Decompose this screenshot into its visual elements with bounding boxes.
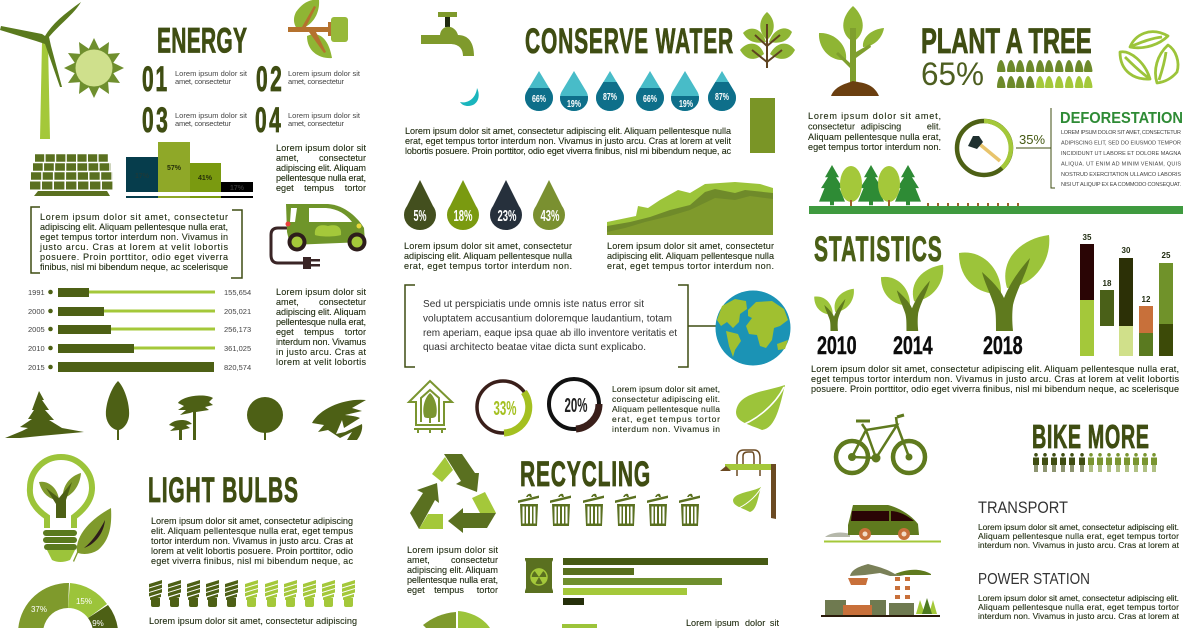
text block: Lorem — [686, 618, 712, 628]
text block: posuere. Proin porttitor, odio eget viverra finibus, nisl mi bibendum neque, ac scelerisque — [811, 384, 1179, 394]
text block: eget — [407, 585, 425, 595]
panel: statistics — [811, 231, 1179, 394]
year labels: 2018 — [983, 331, 1023, 360]
text block — [808, 111, 941, 152]
text block: ADIPISCING ELIT, SED DO EIUSMOD TEMPOR — [1061, 140, 1181, 146]
text block: INCIDIDUNT UT LABORE ET DOLORE MAGNA — [1061, 151, 1181, 157]
icon: branch with pot — [288, 0, 348, 58]
pictogram: bins — [518, 494, 700, 526]
numbered list: 04 — [255, 102, 281, 140]
text block — [686, 618, 779, 628]
chart: 20% ring — [549, 379, 599, 429]
text block: adipiscing elit. Aliquam pellentesque nulla — [607, 251, 775, 261]
text block: adipiscing elit. Aliquam — [407, 565, 498, 575]
text block: eget tempus tortor interdum non. Vivamus in justo arcu. Cras at lorem at velit lobortis — [811, 374, 1179, 384]
icons: tree silhouettes — [5, 381, 366, 440]
chart: 33% ring: 33% — [494, 398, 517, 420]
panel: plant a tree — [808, 6, 1183, 214]
text block: consectetur — [319, 297, 366, 307]
pictogram: percentage drops: 19% — [567, 99, 581, 110]
text block: Aliquam pellentesque nulla erat, eget tempus tortor — [978, 602, 1179, 612]
pictogram: large drops — [404, 180, 565, 230]
panel: conserve water — [404, 12, 795, 434]
donut chart: 9% — [92, 619, 104, 628]
bar chart: yearly values: 2010 — [28, 344, 45, 353]
text block: adipiscing elit. Aliquam — [276, 307, 366, 317]
pictogram: percentage drops: 66% — [643, 94, 657, 105]
stacked bar chart: 12 — [1142, 295, 1151, 304]
bar chart: yearly values: 2015 — [28, 363, 45, 372]
bar chart: yearly values: 256,173 — [224, 325, 251, 334]
bar chart: yearly values: 2000 — [28, 307, 45, 316]
heading: statistics: STATISTICS — [814, 231, 942, 269]
text block: Lorem ipsum dolor sit amet, consectetur — [404, 241, 572, 251]
text block: NISI UT ALIQUIP EX EA COMMODO CONSEQUAT. — [1061, 182, 1181, 188]
text block: tortor — [345, 183, 366, 193]
text block — [405, 126, 732, 156]
icon: water drop crescent — [460, 88, 479, 106]
numbered list: 03 — [142, 102, 168, 140]
pictogram: percentage drops: 19% — [679, 99, 693, 110]
heading: conserve water: CONSERVE WATER — [525, 23, 733, 61]
icon: faucet — [421, 12, 474, 56]
icon: leaf recycle — [1120, 32, 1178, 83]
panel: energy — [0, 0, 366, 372]
heading: energy: ENERGY — [157, 22, 247, 61]
pictogram: large drops: 43% — [540, 208, 560, 225]
text block — [151, 516, 353, 566]
text block: Lorem ipsum dolor sit — [276, 143, 366, 153]
text block: tortor — [345, 327, 366, 337]
illustration: forest and stumps — [809, 165, 1183, 214]
text block: adipiscing elit. Aliquam pellentesque nulla — [404, 251, 573, 261]
pictogram: percentage drops — [525, 71, 736, 111]
heading: light bulbs: LIGHT BULBS — [148, 472, 298, 510]
chart: axe ring — [957, 121, 1011, 175]
panel: recycling — [407, 450, 779, 628]
text block: lorem at velit lobortis posuere. Proin porttitor, odio — [151, 546, 353, 556]
text block: eget — [276, 183, 294, 193]
icon: tree house — [409, 381, 452, 433]
pictogram: percentage drops: 87% — [603, 92, 617, 103]
bracket callout: finibus, nisl mi bibendum neque, ac scelerisque — [40, 262, 228, 272]
pictogram: CFL bulbs — [149, 580, 355, 607]
heading: bike more: BIKE MORE — [1032, 418, 1149, 455]
year labels: 2010 — [817, 331, 857, 360]
text block: Aliquam pellentesque nulla — [612, 404, 720, 414]
text block: elit. Aliquam pellentesque nulla erat, eget tempus — [151, 526, 353, 536]
heading: plant a tree: PLANT A TREE — [921, 23, 1092, 61]
bar chart: yearly values: 1991 — [28, 288, 45, 297]
text block: Lorem ipsum dolor sit — [407, 545, 498, 555]
text block: Lorem ipsum dolor sit amet, — [808, 111, 941, 121]
text block: consectetur adipiscing elit. — [612, 394, 720, 404]
icon: sprout 2018 — [959, 235, 1049, 331]
text block: erat, eget tempus tortor — [612, 414, 720, 424]
bracket callout: quasi architecto beatae vitae dicta sunt explicabo. — [423, 342, 646, 353]
bar chart: yearly values: 2005 — [28, 325, 45, 334]
panel: light bulbs — [18, 457, 357, 628]
bar chart: yearly values: 205,021 — [224, 307, 251, 316]
bar chart: percentages: 57% — [167, 165, 182, 172]
text block: consectetur — [319, 153, 366, 163]
text block: lorem at velit lobortis — [276, 357, 366, 367]
text block: Aliquam pellentesque nulla erat, eget tempus tortor — [978, 531, 1179, 541]
numbered list: amet, consectetur — [175, 119, 232, 128]
numbered list: Lorem ipsum dolor sit — [288, 111, 361, 120]
text block — [607, 241, 775, 271]
stacked bar chart — [1080, 233, 1173, 356]
bracket callout: voluptatem accusantium doloremque laudantium, totam — [423, 314, 672, 324]
numbered list: Lorem ipsum dolor sit — [288, 69, 361, 78]
bar chart: yearly values — [28, 288, 251, 372]
icon: leaf — [736, 385, 785, 430]
bar chart: recycling — [563, 558, 768, 605]
bracket callout: Lorem ipsum dolor sit amet, consectetur — [40, 212, 228, 222]
text block: ipsum — [715, 618, 739, 628]
text block: elit. — [927, 122, 941, 132]
text block: interdum non. Vivamus — [276, 337, 366, 347]
icon: sprout 2014 — [881, 265, 943, 331]
bracket callout: posuere. Proin porttitor, odio eget viverra — [40, 252, 229, 262]
icon: eco light bulb — [30, 457, 111, 562]
heading: transport: TRANSPORT — [978, 498, 1068, 517]
text block: tortor — [477, 585, 498, 595]
green bar — [562, 624, 597, 628]
text block: pellentesque nulla erat, — [276, 173, 366, 183]
numbered list: 02 — [256, 61, 282, 99]
area chart — [607, 182, 773, 235]
bar chart: yearly values: 820,574 — [224, 363, 251, 372]
pictogram: large drops: 5% — [414, 208, 426, 225]
text block: tempus — [434, 585, 464, 595]
bar chart: percentages: 17% — [230, 185, 245, 192]
text block: sit — [770, 618, 779, 628]
text block: pellentesque nulla erat, — [276, 317, 366, 327]
numbered list: Lorem ipsum dolor sit — [175, 111, 248, 120]
text block: amet, — [407, 555, 430, 565]
text block: erat, eget tempus tortor interdum non. Vivamus in justo arcu. Cras at lorem at velit — [405, 136, 731, 146]
text block: consectetur — [451, 555, 498, 565]
chart: 33% ring — [477, 381, 529, 433]
text block: eget viverra finibus, nisl mi bibendum neque, ac — [151, 556, 353, 566]
bar chart: percentages: 17% — [135, 173, 150, 180]
chart: 20% ring: 20% — [564, 395, 588, 417]
pictogram: percentage drops: 87% — [715, 92, 729, 103]
icon: radioactive barrel — [525, 558, 553, 593]
bracket callout: eget tempus tortor interdum non. Vivamus in — [40, 232, 228, 242]
donut chart: 37% — [31, 605, 47, 614]
icon: power station — [821, 564, 940, 617]
text block: amet, — [276, 153, 299, 163]
numbered list: amet, consectetur — [288, 77, 344, 86]
text block: tempus — [304, 327, 334, 337]
text block: erat, eget tempus tortor interdum non. — [607, 261, 774, 271]
icon: sun — [64, 38, 124, 98]
text block — [978, 593, 1180, 621]
text block: eget — [276, 327, 294, 337]
bracket callout: adipiscing elit. Aliquam pellentesque nulla erat, — [40, 222, 228, 232]
icon: electric car — [271, 204, 366, 269]
text block — [612, 384, 720, 434]
text block: NOSTRUD EXERCITATION ULLAMCO LABORIS — [1061, 172, 1181, 178]
text block: Lorem ipsum dolor sit amet, consectetur adipiscing elit. Aliquam pellentesque nulla — [405, 126, 732, 136]
text block — [978, 522, 1180, 550]
text block: Lorem ipsum dolor sit amet, consectetur adipiscing — [149, 616, 357, 626]
year labels — [817, 331, 1023, 360]
text block: Lorem ipsum dolor sit amet, consectetur adipiscing — [151, 516, 353, 526]
text block: erat, eget tempus tortor interdum non. — [404, 261, 572, 271]
icon: sprout 2010 — [814, 289, 854, 331]
icon: shopping bag — [720, 450, 776, 519]
text block: adipiscing — [861, 122, 901, 132]
donut chart — [18, 583, 118, 628]
icon: globe — [716, 290, 790, 366]
icon: van — [824, 505, 941, 542]
numbered list: amet, consectetur — [288, 119, 344, 128]
heading: power station: POWER STATION — [978, 571, 1090, 588]
text block: interdum non. Vivamus in — [612, 424, 720, 434]
text block: dolor — [745, 618, 765, 628]
text block: Lorem ipsum dolor sit — [276, 287, 366, 297]
numbered list: 01 — [142, 61, 167, 99]
text block: lobortis posuere. Proin porttitor, odio eget viverra finibus, nisl mi bibendum neque, ac — [405, 146, 731, 156]
stacked bar chart: 30 — [1122, 246, 1131, 255]
text block: Lorem ipsum dolor sit amet, — [612, 384, 720, 394]
numbered list: Lorem ipsum dolor sit — [175, 69, 248, 78]
text block: LOREM IPSUM DOLOR SIT AMET, CONSECTETUR — [1061, 130, 1181, 136]
text block: interdum non. Vivamus in justo arcu. Cras at lorem at — [978, 540, 1180, 550]
donut chart: 15% — [76, 597, 92, 606]
text block: ALIQUA. UT ENIM AD MINIM VENIAM, QUIS — [1061, 162, 1181, 168]
text block — [1061, 130, 1181, 188]
text block: adipiscing elit. Aliquam — [276, 163, 366, 173]
pictogram: percentage drops: 66% — [532, 94, 546, 105]
text block — [811, 364, 1179, 394]
text block — [276, 143, 366, 193]
panel: bike more — [821, 415, 1180, 621]
icon: wind turbine — [0, 2, 81, 139]
text block — [407, 545, 498, 595]
text block: Aliquam pellentesque nulla erat, — [808, 132, 941, 142]
text block: tempus — [304, 183, 334, 193]
icon: recycle arrows — [410, 454, 496, 533]
icon: seedling — [819, 6, 884, 96]
pictogram: large drops: 18% — [454, 208, 472, 225]
icon: solar panel — [30, 158, 114, 196]
bar chart: percentages: 41% — [198, 175, 213, 182]
pictogram: trees — [997, 60, 1092, 88]
statistic: 35%: 35% — [1019, 132, 1045, 147]
bracket callout — [31, 207, 242, 278]
bracket callout — [405, 285, 716, 367]
text block: eget tempus tortor interdum non. — [808, 142, 941, 152]
icon: bicycle — [836, 415, 925, 473]
text block: in justo arcu. Cras at — [276, 347, 366, 357]
text block: Lorem ipsum dolor sit amet, consectetur — [607, 241, 774, 251]
heading: deforestation: DEFORESTATION — [1060, 110, 1183, 127]
statistic: 65%: 65% — [921, 56, 984, 92]
year labels: 2014 — [893, 331, 933, 360]
numbered list — [142, 61, 361, 140]
text block — [404, 241, 573, 271]
text block: consectetur — [808, 122, 855, 132]
bar chart: percentages — [126, 142, 253, 198]
text block: pellentesque nulla erat, — [407, 575, 498, 585]
stacked bar chart: 35 — [1083, 233, 1092, 242]
bracket callout: rem aperiam, eaque ipsa quae ab illo inventore veritatis et — [423, 328, 677, 339]
stacked bar chart: 18 — [1103, 279, 1112, 288]
heading: recycling: RECYCLING — [520, 456, 650, 494]
divider lines — [1016, 108, 1055, 188]
stacked bar chart: 25 — [1162, 251, 1171, 260]
text block: Lorem ipsum dolor sit amet, consectetur adipiscing elit. — [978, 522, 1179, 532]
text block: Lorem ipsum dolor sit amet, consectetur adipiscing elit. Aliquam pellentesque nulla erat, — [811, 364, 1179, 374]
bar chart: yearly values: 361,025 — [224, 344, 251, 353]
icon: leafy branch — [740, 12, 795, 68]
donut chart — [423, 611, 490, 628]
pictogram: people — [1033, 453, 1157, 472]
text block: tortor interdum non. Vivamus in justo arcu. Cras at — [151, 536, 353, 546]
bracket callout: Sed ut perspiciatis unde omnis iste natus error sit — [423, 299, 644, 310]
text block: amet, — [276, 297, 299, 307]
pictogram: large drops: 23% — [498, 208, 516, 225]
green rectangle — [750, 98, 775, 153]
text block: Lorem ipsum dolor sit amet, consectetur adipiscing elit. — [978, 593, 1179, 603]
bar chart: yearly values: 155,654 — [224, 288, 251, 297]
bracket callout: justo arcu. Cras at lorem at velit lobortis — [39, 242, 228, 252]
numbered list: amet, consectetur — [175, 77, 232, 86]
text block: interdum non. Vivamus in justo arcu. Cras at lorem at — [978, 611, 1180, 621]
text block — [276, 287, 366, 367]
